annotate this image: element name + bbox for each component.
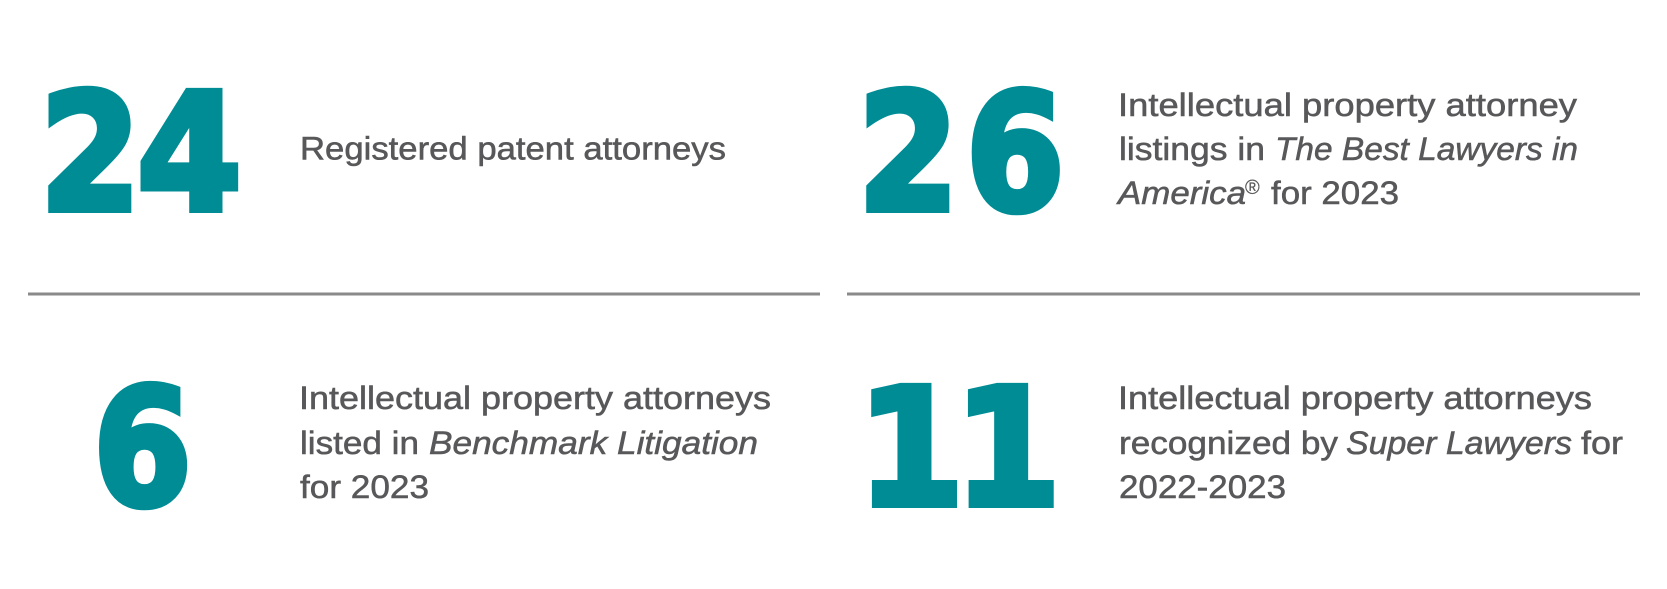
description: Super Lawyers xyxy=(1346,425,1572,461)
number 26: 6 xyxy=(966,59,1064,248)
description: Intellectual property attorneys xyxy=(299,380,771,416)
description: recognized by xyxy=(1119,425,1339,461)
description: for 2023 xyxy=(1271,175,1399,211)
number 26 xyxy=(858,59,1064,248)
description: Intellectual property attorneys xyxy=(1118,380,1592,416)
description: America xyxy=(1116,175,1246,211)
description: Intellectual property attorney xyxy=(1118,87,1578,123)
number 11 xyxy=(857,355,1061,543)
description: for 2023 xyxy=(300,469,429,505)
number 11: 1 xyxy=(954,355,1061,543)
description: listings in xyxy=(1119,131,1265,167)
number 24: 4 xyxy=(137,59,242,248)
description: listed in xyxy=(300,425,419,461)
divider left xyxy=(28,292,820,296)
description: Registered patent attorneys xyxy=(300,130,726,166)
divider right xyxy=(847,292,1640,296)
stat: 6 benchmark litigation xyxy=(93,354,771,543)
stat: 24 registered patent attorneys xyxy=(40,59,726,248)
description xyxy=(299,380,771,505)
description: for xyxy=(1581,425,1623,461)
number 24 xyxy=(40,59,242,248)
description: Benchmark Litigation xyxy=(429,425,758,461)
description: ® xyxy=(1245,177,1260,199)
description: 2022-2023 xyxy=(1119,469,1286,505)
description xyxy=(1118,380,1623,505)
number 24: 2 xyxy=(40,60,141,248)
stat: 26 best lawyers listings xyxy=(858,59,1578,248)
number 26: 2 xyxy=(858,60,959,248)
number 6: 6 xyxy=(93,354,192,543)
stat: 11 super lawyers xyxy=(857,355,1623,543)
description: The Best Lawyers in xyxy=(1275,131,1578,167)
description xyxy=(1116,87,1578,211)
number 11: 1 xyxy=(857,355,964,543)
